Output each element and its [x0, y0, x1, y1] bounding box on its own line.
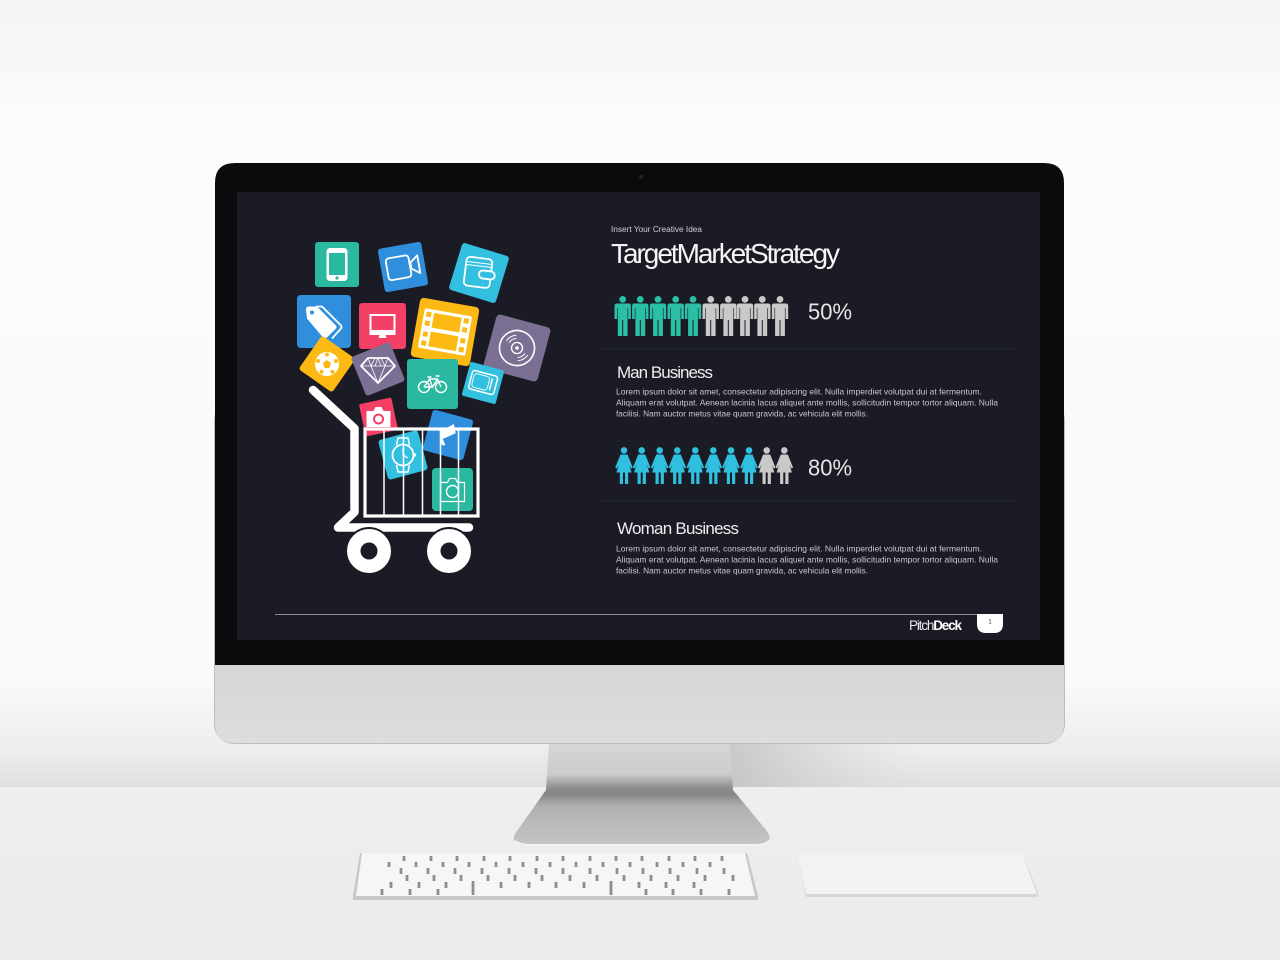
monitor body: [214, 163, 1065, 744]
brand logo: PitchDeck: PitchDeck: [909, 618, 962, 633]
background: desk: [0, 787, 1280, 960]
divider: [600, 500, 1015, 502]
icon tile: monitor: [359, 303, 406, 349]
icon tile: green camera: [432, 468, 473, 511]
illustration: app icons in shopping cart: [297, 242, 551, 575]
eyebrow text: Insert Your Creative Idea: [611, 225, 703, 234]
page number tab: [977, 614, 1003, 633]
text block: woman business description: [616, 544, 998, 576]
icon tile: price tags: [297, 295, 351, 348]
text block: man business description: Lorem ipsum dolor sit amet, consectetur adipiscing elit. Nulla imperdiet volutpat dui at fermentum.: [616, 386, 982, 396]
icon tile: diamond: [351, 342, 405, 396]
cart wheels: [345, 527, 473, 575]
text block: woman business description: Aliquam erat volutpat. Aenean lacinia lacus aliquet ante mollis, sollicitudin tempor tortor aliquam. Nulla: [616, 554, 998, 564]
text block: woman business description: Lorem ipsum dolor sit amet, consectetur adipiscing elit. Nulla imperdiet volutpat dui at fermentum.: [616, 544, 982, 554]
heading: Woman Business: Woman Business: [617, 519, 739, 538]
icon tile: pink camera: [359, 397, 398, 437]
stand shadow on wall: [730, 744, 920, 787]
icon tile: vinyl disc: [483, 314, 551, 382]
pictogram: men 50%: [614, 296, 788, 336]
icon tile: film strip: [410, 297, 480, 367]
value: 80%: 80%: [808, 454, 852, 480]
icon tile: video camera: [378, 242, 428, 292]
icon tile: smartphone: [315, 242, 359, 287]
footer rule: [275, 614, 1003, 615]
pictogram: women 80%: [615, 447, 793, 484]
trackpad: [797, 853, 1038, 897]
heading: Man Business: Man Business: [617, 363, 713, 382]
shopping cart: [313, 390, 478, 575]
icon tile: watch: [378, 430, 428, 480]
icon tile: soccer ball: [298, 335, 356, 393]
text block: man business description: [616, 386, 998, 418]
cart basket: [365, 429, 478, 516]
icon tile: bicycle: [407, 359, 458, 409]
page number tab: 1: [988, 620, 992, 626]
slide screen: [237, 192, 1040, 640]
text block: man business description: facilisi. Nam auctor metus vitae quam gravida, ac vehicula elit mollis.: [616, 408, 868, 418]
icon tile: megaphone: [422, 409, 474, 461]
icon tile: television: [462, 362, 504, 404]
monitor stand: [514, 744, 770, 845]
text block: man business description: Aliquam erat volutpat. Aenean lacinia lacus aliquet ante mollis, sollicitudin tempor tortor aliquam. Nulla: [616, 398, 998, 408]
text block: woman business description: facilisi. Nam auctor metus vitae quam gravida, ac vehicula elit mollis.: [616, 566, 868, 576]
title: TargetMarketStrategy: [611, 238, 840, 269]
divider: [600, 348, 1015, 350]
icon tile: wallet: [448, 242, 510, 304]
cart handle and frame: [313, 390, 469, 528]
keyboard: [353, 853, 758, 900]
value: 50%: 50%: [808, 298, 852, 324]
